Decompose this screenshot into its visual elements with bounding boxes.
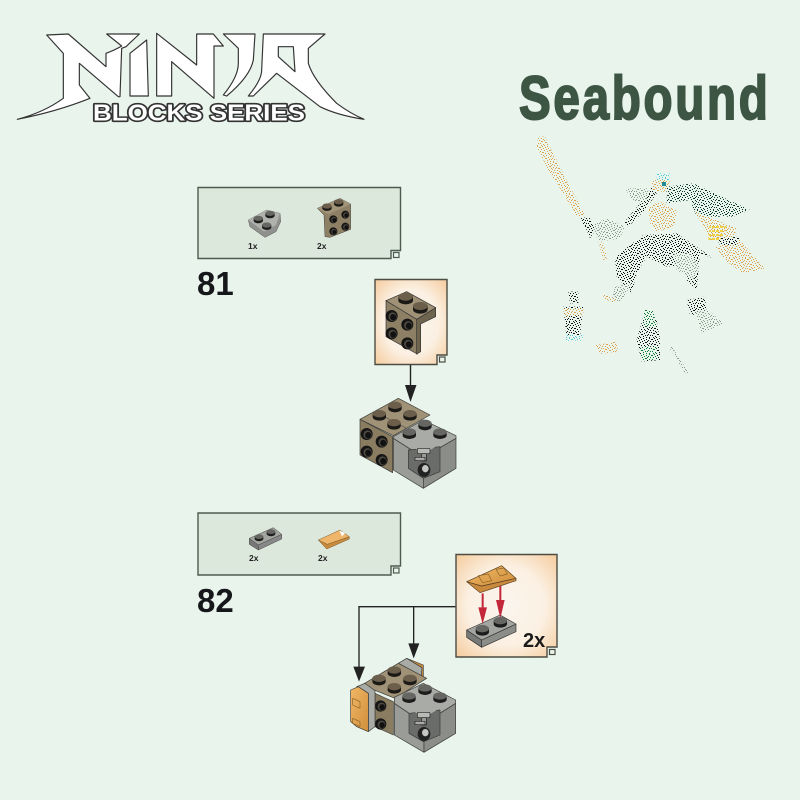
cape trim <box>695 212 737 240</box>
logo letters NINJA <box>17 33 364 119</box>
panel: parts list step 81 <box>198 188 400 258</box>
grey plate <box>467 615 516 647</box>
right leg <box>673 253 700 280</box>
sword <box>537 137 585 217</box>
panel corner icon <box>394 252 399 258</box>
part: gold tile <box>318 530 349 549</box>
callout corner icon <box>440 357 445 362</box>
step number 81: 81 <box>197 265 234 302</box>
green small figure <box>637 310 660 362</box>
callout: gold tile on plate <box>456 554 557 657</box>
part: grey plate <box>249 528 282 550</box>
panel frame <box>198 513 400 575</box>
bracket enlarged <box>386 292 436 354</box>
callout corner icon <box>550 650 555 654</box>
hilt end <box>598 242 607 260</box>
chest <box>648 202 677 232</box>
callout frame <box>456 554 557 657</box>
gold tile <box>467 566 516 593</box>
left leg and foot <box>603 283 632 303</box>
back gold tile <box>407 658 423 677</box>
grey block <box>393 420 456 488</box>
label 2x: 2x <box>317 241 327 251</box>
grey block <box>394 683 456 752</box>
label 2x: 2x <box>523 630 545 652</box>
front grey plate <box>357 683 375 732</box>
waist tatters <box>715 240 765 273</box>
torso and legs <box>615 233 740 293</box>
assembly drawing <box>467 566 516 647</box>
step number 82: 82 <box>197 582 234 619</box>
technic pin <box>415 448 430 477</box>
part: tan bracket <box>317 198 351 237</box>
panel frame <box>198 188 400 258</box>
technic pin <box>415 712 430 741</box>
logo: Ninja Blocks Series <box>17 33 364 126</box>
red arrows <box>478 586 505 624</box>
dotted ninja figure illustration <box>537 137 765 373</box>
part: grey wedge plate <box>248 210 281 237</box>
arrows: callout to build 82 <box>353 607 455 682</box>
grey stick <box>669 347 689 373</box>
small figure left <box>563 292 583 341</box>
tan block <box>360 398 430 473</box>
small orange piece <box>595 342 618 354</box>
build model step 81 <box>360 398 456 488</box>
cape <box>667 183 750 217</box>
arrow: callout to build 81 <box>405 365 416 402</box>
callout: bracket piece <box>375 280 447 364</box>
panel: parts list step 82 <box>198 513 400 575</box>
label 1x: 1x <box>248 241 258 251</box>
yellow sash <box>708 223 727 240</box>
panel corner icon <box>394 568 399 573</box>
head <box>652 173 670 192</box>
raised hand and arm <box>580 187 657 238</box>
forearm <box>593 188 648 242</box>
front gold tile <box>351 687 368 732</box>
build model step 82 <box>351 658 456 752</box>
title: Seabound: Seabound <box>519 63 768 132</box>
back grey plate <box>398 658 422 676</box>
callout frame <box>375 280 447 364</box>
label 2x: 2x <box>318 553 328 563</box>
right foot <box>687 297 723 333</box>
tan body <box>362 663 427 735</box>
logo subtitle: BLOCKS SERIES <box>93 100 305 126</box>
label 2x: 2x <box>249 553 259 563</box>
